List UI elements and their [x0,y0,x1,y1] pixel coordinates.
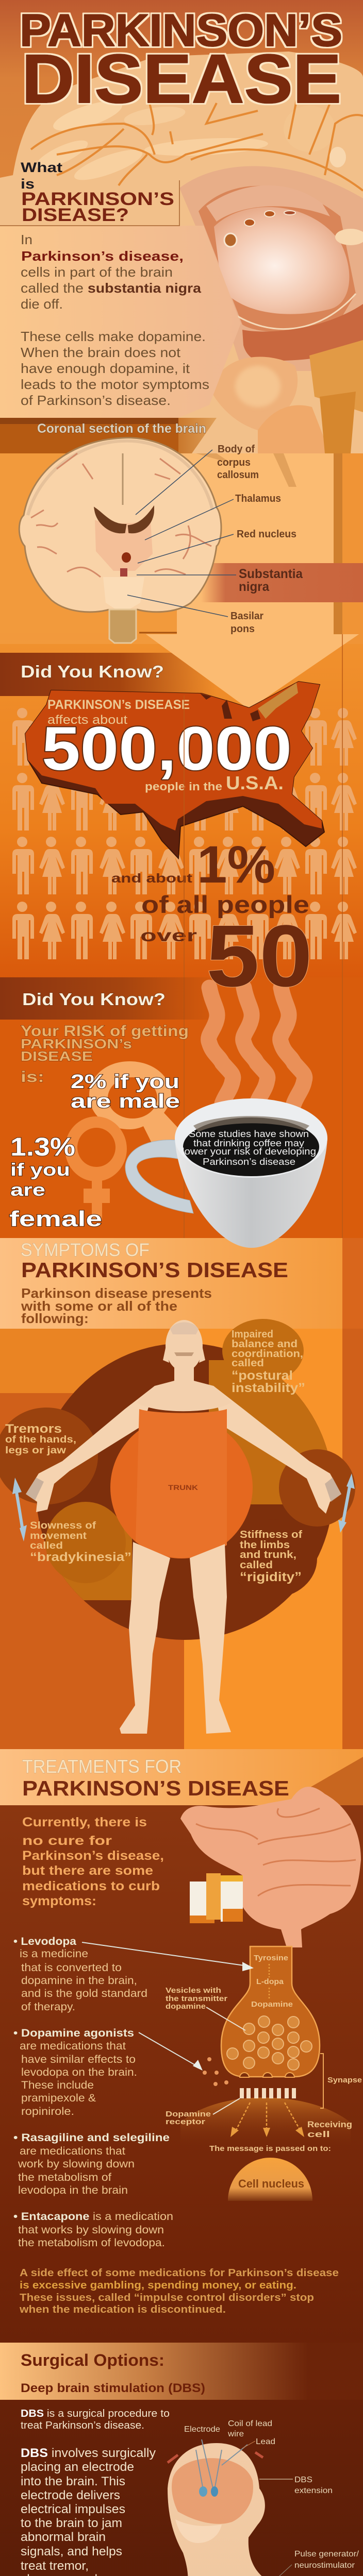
list: entacapone: • Entacapone is a medication [13,2211,173,2223]
stat: 1 percent of all people: 1% [197,835,275,894]
labels: coronal section callouts [127,444,303,635]
text: male risk [71,1071,180,1112]
callout circle: balance [222,1319,304,1383]
callout text: balance: “postural [232,1368,293,1383]
callout text: balance: called [232,1358,264,1369]
labels: coronal section callouts: Body of [218,444,255,455]
callout text: stiffness: “rigidity” [240,1570,302,1584]
list: levodopa: dopamine in the brain, [21,1975,137,1987]
heading panel: symptoms: SYMPTOMS OF [21,1240,150,1260]
labels: coronal section callouts: Substantia [239,567,303,581]
pictogram: crowd of people [12,708,357,959]
heading band: did you know 2 [0,977,222,1020]
callout text: slowness [30,1520,131,1564]
callout text: stiffness: Stiffness of [240,1529,302,1540]
heading panel: symptoms: with some or all of the [21,1298,177,1314]
text block: what is description: called the substantia nigra [21,280,202,296]
labels: coronal section callouts: Thalamus [235,493,281,504]
labels: the transmitter [166,1994,227,2003]
text: dbs description: DBS involves surgically [21,2446,156,2460]
text: dbs description: to the brain to jam [21,2516,122,2530]
labels: coronal section callouts: nigra [239,580,270,594]
callout text: slowness: “bradykinesia” [30,1550,131,1564]
heading band: surgical options: Surgical Options: [21,2351,164,2369]
list: dopamine agonists: have similar effects to [21,2054,136,2065]
heading band: did you know 2: Did You Know? [22,990,166,1009]
text: risk heading: is: [21,1069,44,1086]
text: no cure: no cure for [22,1834,112,1848]
diagram: symptom circles [0,1319,355,1640]
list: dopamine agonists: • Dopamine agonists [13,2027,134,2039]
section background: statistics [0,644,363,979]
list: rasagiline and selegiline: • Rasagiline and selegiline [13,2132,170,2144]
text: coffee note: lower your risk of developing [182,1146,316,1157]
stat: 1 percent of all people [111,835,309,945]
heading: what is: PARKINSON’S [21,189,174,209]
labels: Tyrosine [254,1954,288,1962]
labels: The message is passed on to: [209,2144,331,2153]
stat: 1 percent of all people: over [140,926,197,945]
section background: symptoms lower [0,1329,363,1749]
neuron terminal [221,1946,320,2077]
labels: DBS parts: Coil of lead [228,2419,272,2428]
heading band: coronal section: Coronal section of the brain [37,421,206,436]
callout text: slowness: called [30,1540,63,1551]
text: affects about: affects about [47,713,127,727]
list: levodopa: • Levodopa [13,1936,76,1947]
illustration: human body [26,1320,341,1734]
labels: receptor [166,2117,205,2126]
synapse bracket [320,2054,323,2108]
labels: DBS parts: wire [227,2430,244,2438]
illustration: coffee steam [209,988,305,1104]
list: levodopa: is a medicine [20,1948,88,1960]
text: side effect note: when the medication is discontinued. [19,2304,226,2315]
labels: L-dopa [256,1977,284,1986]
illustration: medication boxes [190,1873,243,1923]
text block: what is description: When the brain does not [21,345,181,360]
text block: what is description: of Parkinson’s disease. [21,393,171,408]
list: dopamine agonists: ropinirole. [21,2106,74,2117]
text: dbs description: placing an electrode [21,2460,134,2474]
labels: coronal section callouts: callosum [217,469,259,481]
arrow panel: labels background [0,453,363,709]
signal arrows [235,1964,302,2133]
list: entacapone: that works by slowing down [18,2224,164,2236]
list: levodopa: and is the gold standard [21,1988,147,1999]
text: people in the USA: U.S.A. [226,772,284,793]
labels: Synapse [327,2076,362,2084]
heading band: did you know 1: Did You Know? [21,662,164,681]
text: side effect note: These issues, called “impulse control disorders” stop [20,2292,314,2303]
heading: what is [21,160,174,225]
text: female risk: if you [10,1160,70,1180]
callout text: tremors [5,1422,76,1456]
list: dopamine agonists: levodopa on the brain. [21,2066,137,2078]
text block: what is description [21,232,209,408]
labels: coronal section callouts: Basilar [230,611,263,622]
panel: what is Parkinson's disease [0,160,241,418]
labels: coronal section callouts: pons [230,623,255,635]
dopamine molecules [203,2057,228,2086]
text: people in the USA: people in the [145,780,222,793]
text block: what is description: These cells make dopamine. [21,329,206,344]
callout text: stiffness: and trunk, [240,1549,296,1561]
list: entacapone [13,2211,173,2249]
text: no cure: Parkinson’s disease, [22,1849,164,1863]
text: no cure [22,1815,164,1908]
callout text: slowness: Slowness of [30,1520,96,1531]
pointer lines [82,1942,248,2114]
heading: what is: is [21,176,35,192]
callout text: balance: Impaired [232,1329,273,1340]
text: risk heading: PARKINSON’s [21,1036,132,1052]
labels: Dopamine [251,2000,293,2009]
text: risk heading: Your RISK of getting [21,1023,189,1040]
decorative strip lines [184,634,342,1238]
text: side effect note: is excessive gambling, spending money, or eating. [20,2280,296,2291]
list: rasagiline and selegiline: the metabolism of [18,2172,111,2183]
text block: what is description: die off. [21,296,63,312]
section background: introduction [0,0,363,654]
illustration: head with DBS implant [125,2439,322,2576]
text: coffee note: Some studies have shown [189,1129,309,1139]
text: no cure: medications to curb [22,1879,160,1893]
callout text: tremors: Tremors [5,1422,62,1436]
labels: DBS parts: extension [294,2486,333,2495]
callout text: balance [232,1329,305,1395]
text: dbs description: signals, and helps [21,2545,122,2558]
list: rasagiline and selegiline: are medications that [20,2145,125,2157]
stat: 1 percent of all people: of all people [141,891,309,918]
labels: coronal section callouts: Red nucleus [237,529,296,540]
text: no cure: Currently, there is [22,1815,147,1829]
callout text: balance: instability” [232,1381,305,1395]
text: no cure: symptoms: [22,1894,96,1908]
labels: Receiving [307,2120,352,2129]
heading panel: symptoms [0,1238,363,1329]
list: rasagiline and selegiline [13,2132,170,2196]
text: female risk: female [9,1207,102,1231]
title: DISEASE [22,41,341,117]
text: side effect note: A side effect of some medications for Parkinson’s disease [20,2267,339,2279]
illustration: large brain [0,52,363,453]
labels: DBS parts: DBS [294,2476,312,2484]
list: dopamine agonists: pramipexole & [21,2092,96,2104]
band: substantia nigra highlight [201,563,363,602]
callout circle: slowness [45,1502,126,1583]
callout text: balance: balance and [232,1338,298,1350]
cell nucleus [228,2158,312,2201]
list: entacapone: the metabolism of levodopa. [18,2237,165,2249]
big number: 500,000: 500,000 [42,714,292,783]
heading band: surgical options: Deep brain stimulation (DBS) [21,2381,205,2395]
heading band: surgical options [0,2343,363,2400]
heading band: treatments [0,1749,363,1805]
text: coffee note [182,1129,316,1167]
text: dbs description: into the brain. This [21,2475,125,2488]
section background: risk [0,977,363,1238]
heading text: treatments: TREATMENTS FOR [22,1756,182,1777]
list: levodopa: of therapy. [21,2001,75,2013]
labels: DBS parts: Lead [256,2437,275,2446]
heading: what is: What [21,160,62,175]
text: coffee note: that drinking coffee may [193,1138,304,1148]
heading: what is: DISEASE? [22,205,129,225]
text block: what is description: leads to the motor symptoms [21,377,209,392]
heading text: treatments: PARKINSON’S DISEASE [22,1776,289,1800]
text: dbs description: electrode delivers [21,2488,120,2502]
vesicles [227,2016,312,2070]
labels: Vesicles with [166,1986,221,1995]
callout text: tremors: legs or jaw [5,1445,66,1456]
text: risk heading [21,1023,189,1086]
heading text: treatments [22,1756,289,1800]
heading panel: symptoms: Parkinson disease presents [21,1285,212,1301]
heading band: did you know 1 [0,653,217,696]
text: female risk [9,1132,102,1231]
callout text: stiffness: the limbs [240,1539,290,1551]
label: trunk: TRUNK [168,1483,198,1492]
labels: cell [307,2129,330,2139]
text block: what is description: cells in part of the brain [21,264,173,280]
text: dbs description: treat tremor, [21,2559,89,2573]
arrow tip over statistics [146,634,359,709]
labels [166,1954,362,2153]
list: dopamine agonists [13,2027,137,2117]
callout text: slowness: movement [30,1531,87,1541]
labels: DBS parts: Electrode [184,2425,220,2434]
illustration: coronal brain section [19,438,221,643]
text: dbs description: treat Parkinson’s disease. [21,2420,144,2431]
illustration: pink brain [180,1787,361,1947]
text block: what is description: Parkinson’s disease, [21,248,184,264]
heading band: coronal section [0,418,217,453]
text: dbs description: abnormal brain [21,2530,106,2544]
callout text: stiffness: called [240,1560,273,1571]
list: dopamine agonists: These include [21,2079,94,2091]
text block: what is description: have enough dopamine, it [21,361,190,376]
text: female risk: 1.3% [10,1132,75,1161]
receptors [240,2088,296,2098]
callout text: balance: coordination, [232,1348,303,1360]
labels: DBS parts: neurostimulator [294,2561,355,2570]
list: levodopa: that is converted to [21,1962,122,1974]
text: male risk: are male [71,1091,180,1112]
callout text: tremors: of the hands, [5,1434,76,1445]
text: coffee note: Parkinson’s disease [203,1157,295,1167]
text: affects about [47,698,190,727]
heading panel: symptoms: following: [21,1311,89,1326]
inner circle [110,1416,253,1558]
labels: DBS parts: Pulse generator/ [294,2550,359,2558]
list: rasagiline and selegiline: levodopa in the brain [18,2184,128,2196]
callout text: stiffness [240,1529,302,1584]
text: affects about: PARKINSON’s DISEASE [47,698,190,712]
callout circle: stiffness [229,1519,317,1598]
diagram: synapse [82,1942,362,2201]
labels: coronal section callouts: corpus [217,457,251,468]
labels: Dopamine [166,2110,211,2119]
text block: what is description: In [21,232,32,247]
map: United States [25,682,324,858]
text: dbs description [21,2408,170,2576]
text: people in the USA [145,772,284,793]
section background: treatments [0,1805,363,2576]
list: rasagiline and selegiline: work by slowing down [18,2158,135,2170]
diagram: synapse: Cell nucleus [238,2177,304,2190]
title: PARKINSON’S [20,5,342,56]
labels: DBS parts [184,2419,359,2576]
illustration: coffee cup [125,1098,327,1248]
text: female risk: are [10,1180,45,1200]
big number: over 50: 50 [206,907,312,1005]
list: dopamine agonists: are medications that [20,2040,126,2052]
callout circle: hand right [279,1449,355,1527]
icon: tremor arrows [12,1473,355,1541]
receiving cell [180,2097,351,2146]
title [20,5,342,117]
stat: 1 percent of all people: and about [111,871,193,886]
callout circle: tremors [0,1408,98,1504]
text: no cure: but there are some [22,1863,153,1878]
text: dbs description: DBS is a surgical procedure to [21,2408,170,2419]
text: dbs description: electrical impulses [21,2502,125,2516]
icon: female symbol [65,1116,127,1221]
labels: dopamine [166,2002,206,2011]
text: risk heading: DISEASE [21,1048,93,1064]
text: male risk: 2% if you [71,1071,179,1093]
icon: male symbol [89,1061,186,1149]
text: side effect note [19,2267,339,2315]
release points [240,2073,294,2077]
heading panel: symptoms: PARKINSON’S DISEASE [21,1258,288,1282]
list: levodopa [13,1936,147,2013]
